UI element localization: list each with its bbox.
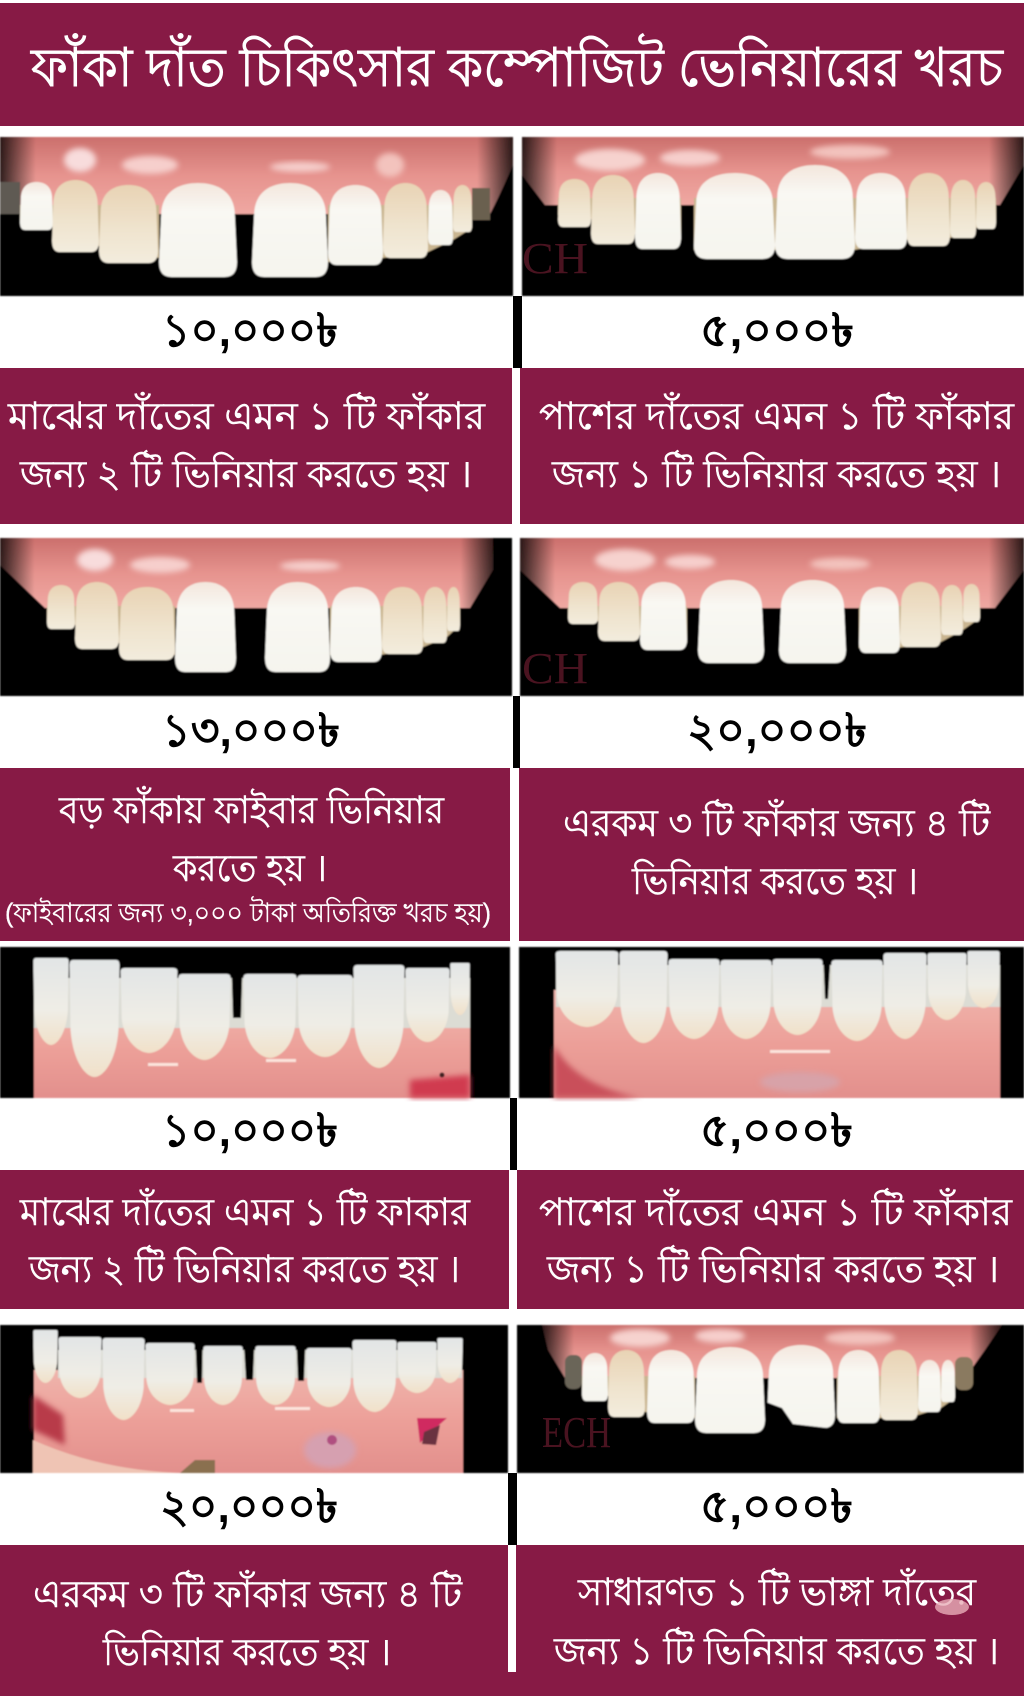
- caption panel: জন্য ১ টি ভিনিয়ার করতে হয় ।: [546, 1245, 999, 1291]
- photo: wide central gap upper teeth: [0, 538, 512, 696]
- watermark: CH: [522, 234, 588, 283]
- caption panel: এরকম ৩ টি ফাঁকার জন্য ৪ টি: [563, 799, 991, 845]
- caption panel: [0, 1170, 509, 1309]
- price: ২০,০০০৳: [160, 1480, 338, 1532]
- photo: chipped upper tooth: [517, 1325, 1024, 1473]
- caption panel: মাঝের দাঁতের এমন ১ টি ফাঁকার: [7, 392, 486, 438]
- caption panel: জন্য ২ টি ভিনিয়ার করতে হয় ।: [19, 450, 472, 496]
- price: ১০,০০০৳: [162, 1104, 338, 1156]
- panel: lower three gaps, 20,000 taka: [0, 1325, 508, 1696]
- panel: lower side gap, 5,000 taka: [517, 947, 1024, 1309]
- price: ১৩,০০০৳: [162, 704, 340, 756]
- caption panel: করতে হয় ।: [172, 848, 327, 890]
- caption panel: [517, 1170, 1024, 1309]
- caption panel: সাধারণত ১ টি ভাঙ্গা দাঁতের: [577, 1568, 977, 1614]
- caption panel: [519, 768, 1024, 941]
- price: ৫,০০০৳: [700, 1480, 853, 1532]
- caption panel: ভিনিয়ার করতে হয় ।: [631, 859, 918, 903]
- price: ১০,০০০৳: [162, 304, 338, 356]
- price: ৫,০০০৳: [700, 1104, 853, 1156]
- caption panel: জন্য ১ টি ভিনিয়ার করতে হয় ।: [551, 450, 1001, 496]
- watermark: CH: [522, 644, 588, 693]
- photo: side gap lower teeth: [519, 947, 1024, 1098]
- watermark: ECH: [542, 1408, 611, 1457]
- caption panel: পাশের দাঁতের এমন ১ টি ফাঁকার: [539, 1188, 1013, 1234]
- photo: central gap lower teeth: [0, 947, 510, 1098]
- caption panel: [0, 768, 510, 941]
- caption panel: জন্য ১ টি ভিনিয়ার করতে হয় ।: [553, 1627, 999, 1673]
- caption panel: জন্য ২ টি ভিনিয়ার করতে হয় ।: [28, 1245, 460, 1291]
- caption panel: এরকম ৩ টি ফাঁকার জন্য ৪ টি: [33, 1570, 463, 1616]
- caption panel: [0, 1545, 508, 1696]
- caption panel: [520, 368, 1024, 524]
- caption panel: [508, 1545, 1024, 1696]
- caption panel: পাশের দাঁতের এমন ১ টি ফাঁকার: [539, 392, 1015, 438]
- photo: lateral gap upper teeth: [522, 137, 1024, 296]
- photo: central gap upper teeth: [0, 137, 513, 296]
- caption panel: (ফাইবারের জন্য ৩,০০০ টাকা অতিরিক্ত খরচ হয়): [5, 896, 491, 928]
- panel: middle gap, 10,000 taka: [0, 137, 513, 524]
- caption panel: [0, 368, 512, 524]
- caption panel: বড় ফাঁকায় ফাইবার ভিনিয়ার: [58, 786, 445, 832]
- caption panel: ভিনিয়ার করতে হয় ।: [102, 1630, 391, 1674]
- title banner: [0, 3, 1024, 126]
- price: ৫,০০০৳: [700, 304, 854, 356]
- caption panel: মাঝের দাঁতের এমন ১ টি ফাকার: [19, 1188, 471, 1234]
- price: ২০,০০০৳: [687, 704, 867, 756]
- panel: large gap, 13,000 taka: [0, 538, 512, 941]
- panel: lower middle gap, 10,000 taka: [0, 947, 510, 1309]
- photo: three gaps lower teeth: [0, 1325, 508, 1473]
- panel: side gap, 5,000 taka: [520, 137, 1024, 524]
- panel: broken tooth, 5,000 taka: [508, 1325, 1024, 1696]
- photo: three gaps upper teeth: [520, 538, 1024, 696]
- panel: three gaps, 20,000 taka: [519, 538, 1024, 941]
